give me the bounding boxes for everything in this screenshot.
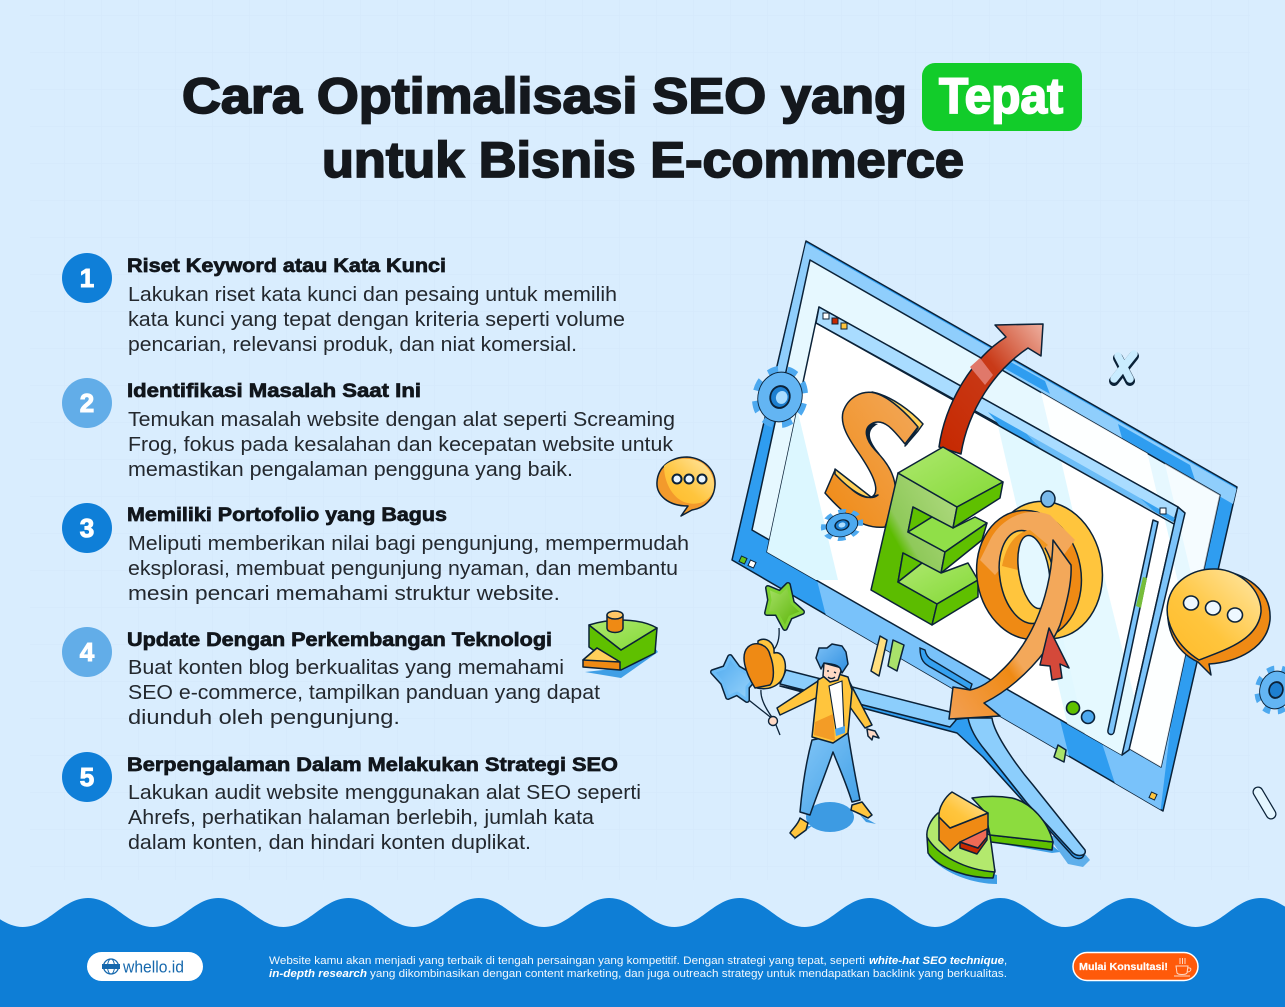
step 3: mesin pencari memahami struktur website. bbox=[128, 582, 560, 605]
icon: pill bar bbox=[1258, 792, 1271, 814]
person bbox=[768, 644, 879, 840]
logo pill: whello.id bbox=[122, 958, 184, 976]
step 2: Temukan masalah website dengan alat seperti Screaming bbox=[128, 408, 675, 431]
letter S bbox=[825, 392, 923, 527]
footer text: in-depth research bbox=[269, 968, 367, 980]
step 5: dalam konten, dan hindari konten duplikat. bbox=[128, 831, 531, 854]
status squares bbox=[739, 556, 1157, 800]
browser window bbox=[766, 306, 1186, 756]
monitor stand bbox=[780, 670, 1090, 867]
icon: small speech bubble bbox=[657, 457, 715, 516]
logo pill bbox=[87, 952, 203, 981]
step 4: SEO e-commerce, tampilkan panduan yang dapat bbox=[128, 681, 600, 704]
monitor border light bands bbox=[778, 243, 1237, 810]
illustration: SEO monitor bbox=[731, 240, 1238, 867]
step 2: memastikan pengalaman pengguna yang baik. bbox=[128, 458, 573, 481]
step 5: Ahrefs, perhatikan halaman berlebih, jumlah kata bbox=[128, 806, 595, 829]
monitor screen bbox=[752, 260, 1220, 767]
title highlight: Tepat bbox=[922, 63, 1082, 131]
step 2: 2 bbox=[80, 388, 94, 418]
footer text: Website kamu akan menjadi yang terbaik di tengah persaingan yang kompetitif. Dengan strategi yang tepat, seperti bbox=[269, 955, 865, 967]
step 2 bbox=[62, 378, 675, 481]
title: untuk Bisnis E-commerce bbox=[322, 132, 964, 188]
person shadow bbox=[806, 802, 854, 832]
title: Cara Optimalisasi SEO yang bbox=[182, 68, 907, 124]
step 2: Identifikasi Masalah Saat Ini bbox=[127, 380, 421, 402]
sticky notes bbox=[871, 636, 1066, 762]
big gear bbox=[750, 365, 810, 429]
step 1 bbox=[62, 253, 625, 356]
footer text: white-hat SEO technique bbox=[869, 955, 1004, 967]
shoes bbox=[790, 818, 808, 838]
icon: cup bbox=[1174, 958, 1191, 976]
step 1: Riset Keyword atau Kata Kunci bbox=[127, 255, 446, 277]
title highlight: Tepat: Tepat bbox=[939, 68, 1063, 124]
footer text: yang dikombinasikan dengan content marketing, dan juga outreach strategy untuk mendapatkan backlink yang berkualitas. bbox=[370, 968, 1007, 980]
step 3 bbox=[62, 503, 689, 605]
step 4: Buat konten blog berkualitas yang memahami bbox=[128, 656, 564, 679]
footer text: , bbox=[1004, 955, 1007, 967]
red arrow up bbox=[939, 324, 1043, 454]
arms bbox=[777, 681, 820, 715]
step 1: kata kunci yang tepat dengan kriteria seperti volume bbox=[128, 308, 625, 331]
icon: right gear bbox=[1253, 665, 1285, 715]
icon: small chart block bbox=[583, 611, 658, 678]
jacket bbox=[812, 672, 852, 743]
step 5 bbox=[62, 752, 641, 854]
footer text bbox=[269, 955, 1007, 980]
step 3: eksplorasi, membuat pengunjung nyaman, dan membantu bbox=[128, 557, 678, 580]
step 4: diunduh oleh pengunjung. bbox=[128, 706, 400, 729]
small gear on screen bbox=[822, 509, 862, 541]
icon: large speech bubble bbox=[1167, 569, 1270, 675]
letter E bbox=[871, 447, 1003, 625]
hair bbox=[816, 644, 848, 673]
footer band bbox=[0, 898, 1285, 1007]
title bbox=[182, 63, 1082, 188]
jeans bbox=[800, 733, 860, 815]
consult button: Mulai Konsultasi! bbox=[1079, 961, 1168, 973]
step 4: 4 bbox=[80, 637, 95, 667]
step 3: Meliputi memberikan nilai bagi pengunjung, mempermudah bbox=[128, 532, 689, 555]
step 4: Update Dengan Perkembangan Teknologi bbox=[127, 629, 552, 651]
step 5: Berpengalaman Dalam Melakukan Strategi SEO bbox=[127, 754, 618, 776]
pie chart bbox=[927, 792, 1060, 884]
letter O ring bbox=[967, 491, 1113, 648]
icon: cross shape bbox=[1114, 354, 1134, 381]
step 2: Frog, fokus pada kesalahan dan kecepatan website untuk bbox=[128, 433, 674, 456]
monitor body bbox=[732, 241, 1237, 811]
orange arrow down bbox=[949, 540, 1071, 719]
step 3: Memiliki Portofolio yang Bagus bbox=[127, 504, 447, 526]
step 4 bbox=[62, 627, 600, 729]
step 3: 3 bbox=[80, 513, 94, 543]
scrollbar bbox=[1108, 520, 1158, 734]
cursor bbox=[1040, 628, 1069, 680]
monitor dots bbox=[1066, 702, 1094, 724]
step 5: 5 bbox=[80, 762, 94, 792]
balloons bbox=[713, 585, 802, 735]
step 5: Lakukan audit website menggunakan alat SEO seperti bbox=[128, 781, 641, 804]
icon: globe bbox=[102, 959, 120, 974]
step 1: 1 bbox=[80, 263, 94, 293]
step 1: Lakukan riset kata kunci dan pesaing untuk memilih bbox=[128, 283, 617, 306]
head bbox=[823, 663, 842, 682]
bottom slot bbox=[920, 648, 972, 690]
consult button bbox=[1073, 952, 1198, 980]
step 1: pencarian, relevansi produk, dan niat komersial. bbox=[128, 333, 577, 356]
